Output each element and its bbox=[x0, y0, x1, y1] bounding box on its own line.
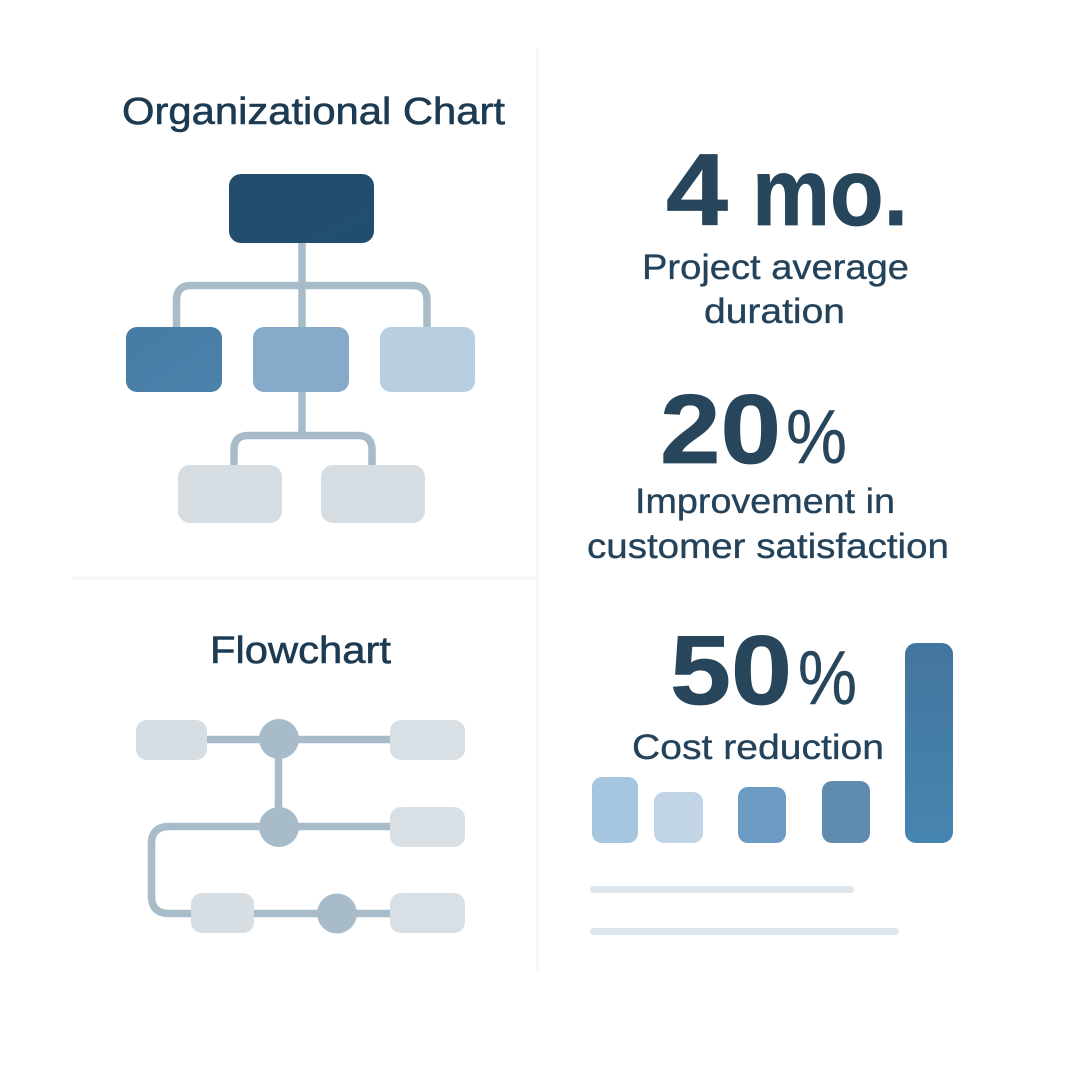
stat: 50 percent: % bbox=[798, 636, 857, 721]
stat: 50 percent: Cost reduction bbox=[632, 728, 884, 767]
title: Flowchart: Flowchart bbox=[210, 630, 391, 672]
org chart bbox=[126, 174, 475, 523]
stat: 4 months: duration bbox=[704, 292, 845, 331]
stat: 20 percent: 20 bbox=[660, 374, 781, 484]
stat: 50 percent: 50 bbox=[670, 615, 792, 725]
bar chart bbox=[590, 643, 953, 935]
stat: 4 months bbox=[642, 133, 909, 331]
stat: 4 months: Project average bbox=[642, 248, 909, 287]
stat: 50 percent bbox=[632, 615, 884, 767]
stat: 20 percent: customer satisfaction bbox=[587, 527, 949, 566]
stat: 20 percent: Improvement in bbox=[635, 482, 895, 521]
stat: 20 percent: % bbox=[786, 395, 847, 480]
flowchart bbox=[136, 719, 465, 934]
stat: 4 months: 4 bbox=[666, 133, 728, 247]
stat: 20 percent bbox=[587, 374, 949, 566]
stat: 4 months: mo. bbox=[752, 139, 908, 246]
title: Organizational Chart: Organizational Chart bbox=[122, 91, 505, 133]
